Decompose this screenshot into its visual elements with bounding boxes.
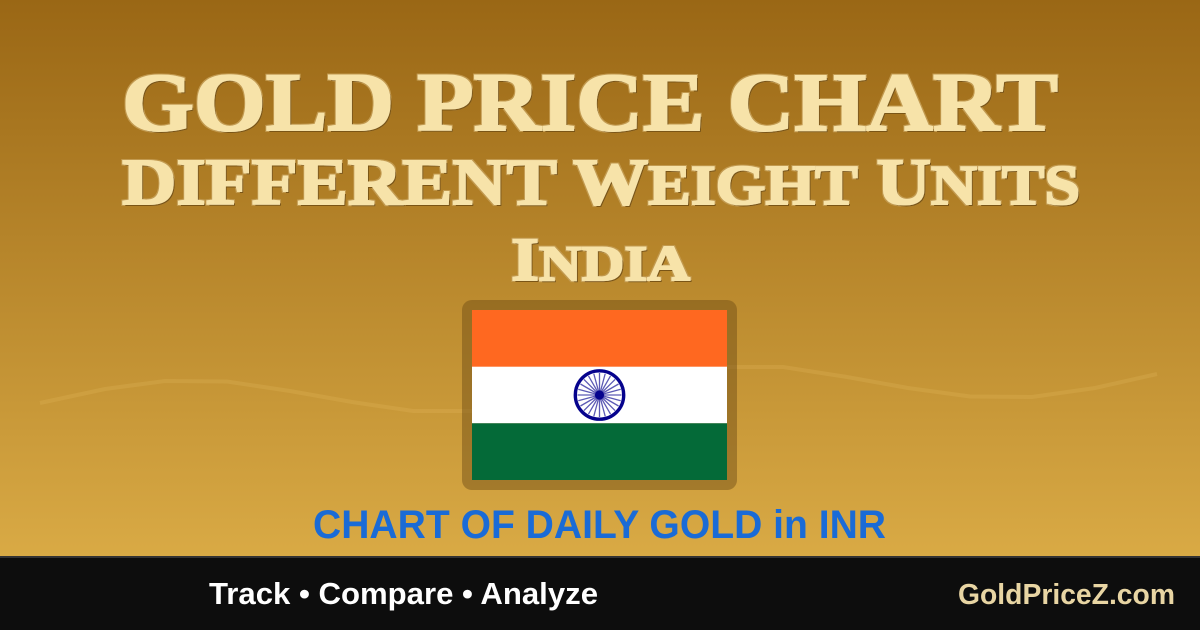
flag of India [472, 310, 727, 480]
footer bar [0, 556, 1200, 630]
tagline: Track • Compare • Analyze [209, 576, 598, 611]
flag frame [462, 300, 737, 490]
site name: GoldPriceZ.com [958, 579, 1175, 611]
subtitle: country: INDIA [511, 227, 690, 294]
title: gold price chart: GOLD PRICE CHART [122, 56, 1058, 148]
subtitle: different weight units: DIFFERENT W EIGHT UNITS [122, 146, 1080, 219]
icon: ashoka chakra [575, 371, 624, 419]
chart caption: CHART OF DAILY GOLD in INR [313, 503, 886, 547]
chart line decoration [40, 367, 1157, 411]
